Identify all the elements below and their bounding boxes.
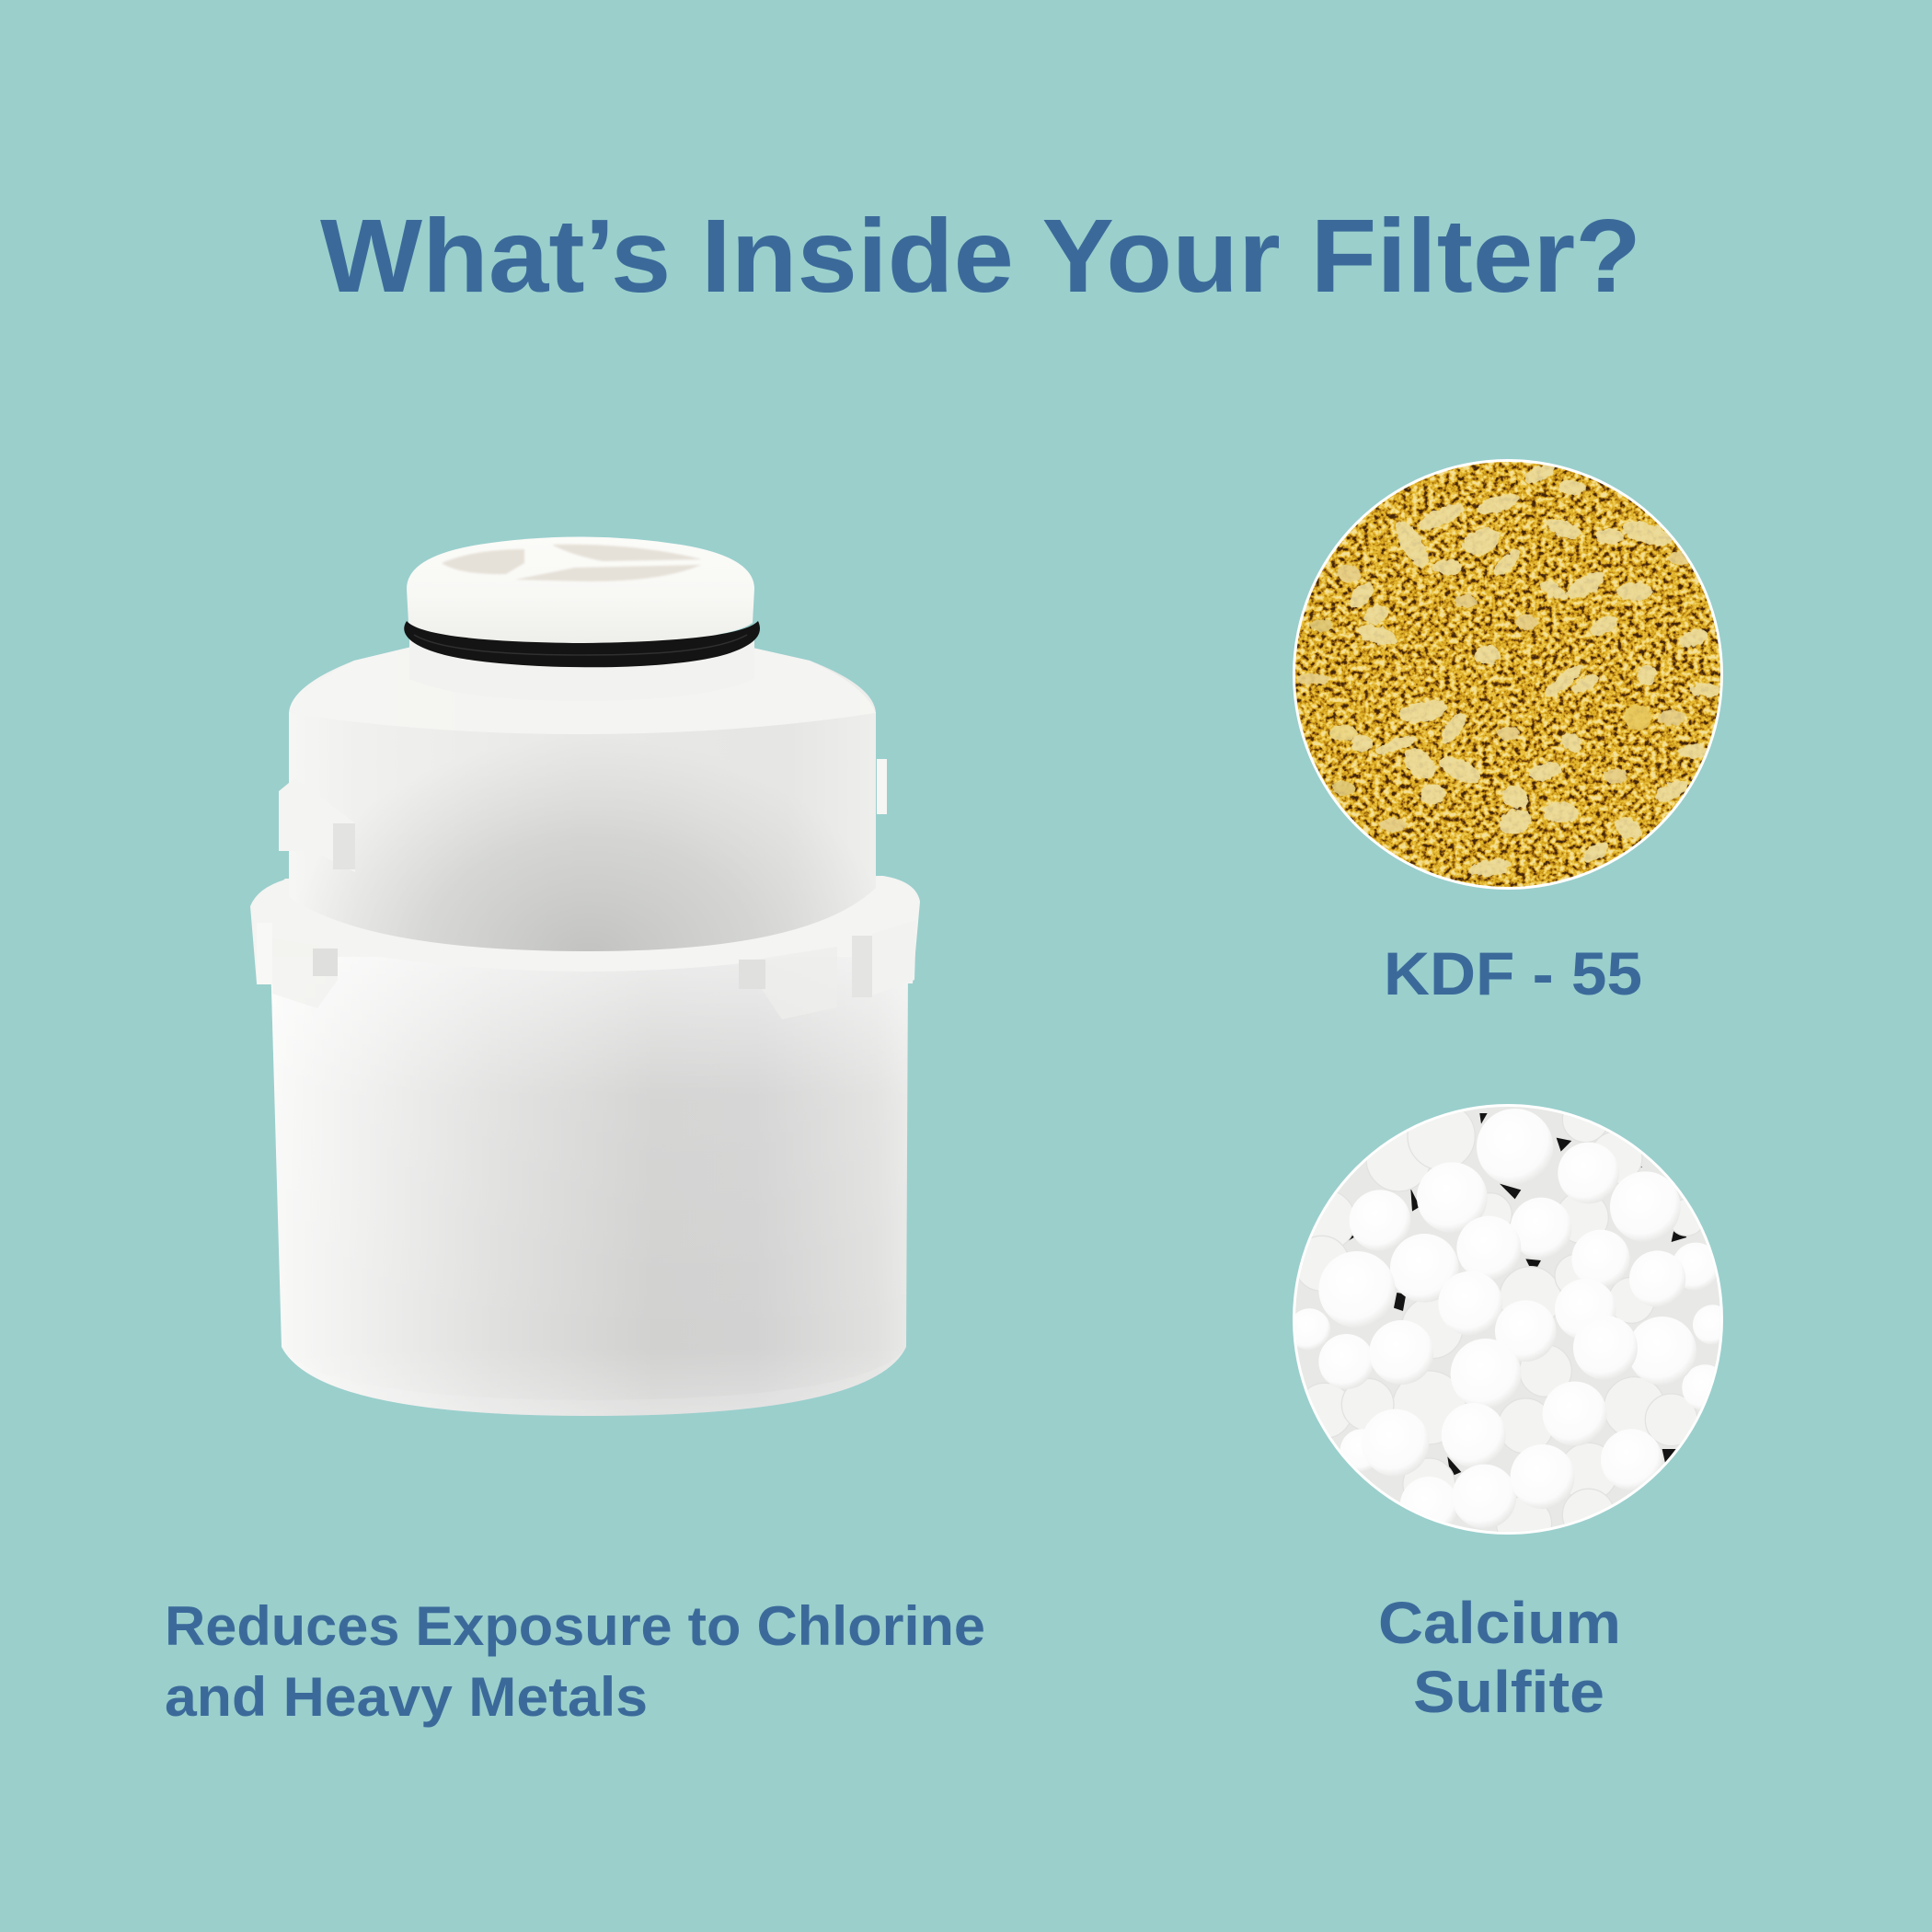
- back spheres: [1299, 1111, 1700, 1532]
- upper body: [289, 644, 876, 951]
- moulded tabs: [257, 759, 916, 1019]
- calcium sulfite photo: [1288, 1097, 1732, 1552]
- calcium sulfite label: Calcium: [1378, 1590, 1621, 1656]
- KDF-55 label: KDF - 55: [1384, 939, 1642, 1007]
- cap openings: [442, 545, 702, 581]
- collar flange: [250, 876, 920, 983]
- calcium sulfite label: Sulfite: [1413, 1659, 1604, 1725]
- KDF-55 photo: [1288, 455, 1730, 897]
- neck: [409, 635, 754, 701]
- lower body: [270, 957, 908, 1416]
- benefit caption: and Heavy Metals: [165, 1666, 648, 1728]
- KDF chips: [1295, 460, 1719, 880]
- collar band: [253, 879, 918, 972]
- spheres: [1289, 1109, 1732, 1535]
- title: What’s Inside Your Filter?: [320, 198, 1641, 314]
- gaps between spheres: [1345, 1113, 1686, 1477]
- benefit caption: Reduces Exposure to Chlorine: [165, 1595, 985, 1657]
- filter cartridge photo: [250, 537, 920, 1416]
- cap: [407, 537, 754, 643]
- sealing ring: [404, 621, 760, 667]
